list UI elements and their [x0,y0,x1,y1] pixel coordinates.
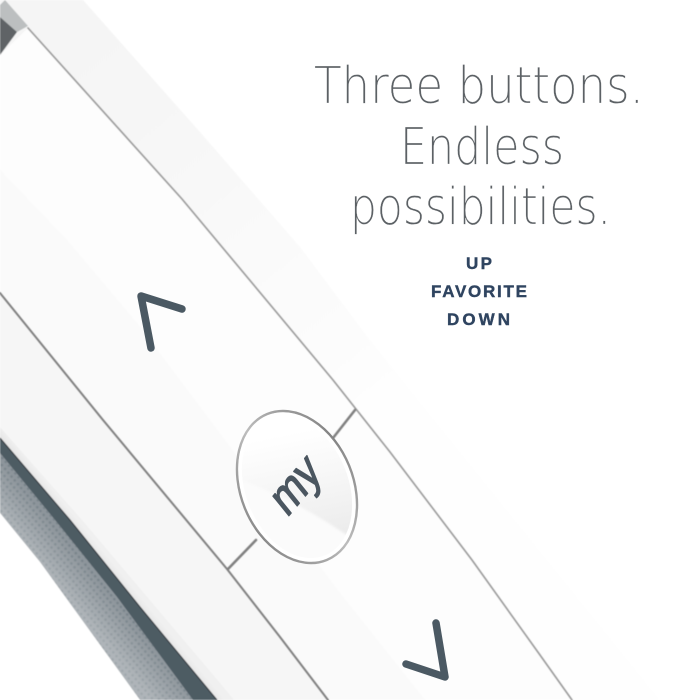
divider: upper notch [333,410,355,438]
body: dark trim [0,438,217,700]
button labels [431,254,527,329]
title [314,57,644,237]
my button label: my [260,442,330,527]
top corner: dark trim [0,17,17,55]
my button lower crescent [253,505,346,562]
button divider lines [0,28,572,700]
icon: down chevron [406,623,445,677]
label: up: UP [466,254,492,273]
body: upper button face [0,28,572,700]
body: lower button [0,293,328,700]
my button [236,410,358,564]
body: side bevel [0,427,234,700]
divider: lower notch [228,540,256,569]
label: down: DOWN [447,310,510,329]
white area below grille [0,513,140,700]
body: trim edge [0,438,217,700]
icon: up chevron [141,296,182,348]
my button disc [215,393,379,581]
body: textured grille [0,453,193,700]
title line 3: possibilities. [350,178,611,237]
my button rim [215,393,379,581]
my button inner ring [219,397,375,577]
divider: left edge [0,293,328,700]
divider: right edge [28,28,572,700]
title line 2: Endless [400,118,564,177]
top corner: light trim [0,0,28,32]
body: lower face [0,170,425,700]
title line 1: Three buttons. [314,57,644,116]
label: favorite: FAVORITE [431,282,527,301]
